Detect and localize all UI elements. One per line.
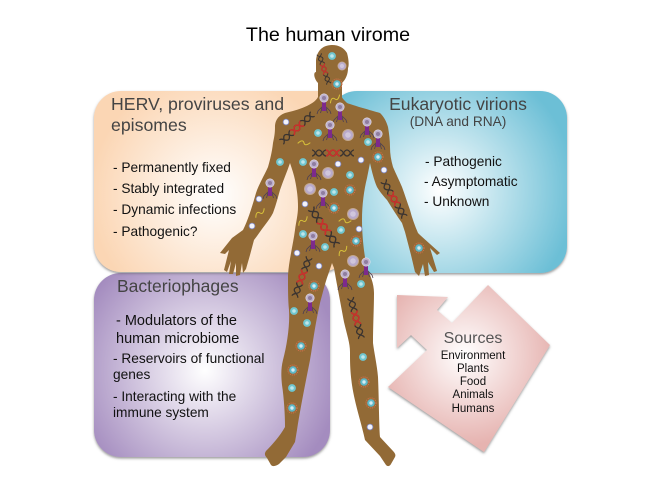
small white virions (249, 119, 387, 430)
list: bacteriophage roles: immune system (113, 405, 209, 420)
list: sources: Animals (453, 389, 494, 401)
list: HERV properties: - Permanently fixed (113, 160, 231, 175)
list: bacteriophage roles: - Reservoirs of functional (113, 351, 264, 366)
list: virion categories: - Unknown (424, 194, 489, 209)
heading: sources: Sources (444, 330, 502, 347)
list: bacteriophage roles: - Modulators of the (116, 313, 237, 329)
panel: HERV, proviruses and episomes (94, 91, 348, 272)
spiked virions (287, 79, 424, 413)
DNA proviruses (279, 53, 407, 339)
panel: eukaryotic virions (330, 91, 567, 273)
bacteriophages (263, 94, 385, 314)
heading: HERV: episomes (111, 115, 187, 135)
list: bacteriophage roles: - Interacting with the (113, 389, 236, 404)
list: sources: Plants (457, 363, 489, 375)
list: sources: Food (460, 376, 486, 388)
title: The human virome (246, 24, 410, 46)
large lilac virions (304, 62, 359, 267)
list: virion categories: - Pathogenic (425, 154, 502, 169)
list: HERV properties: - Stably integrated (113, 181, 224, 196)
human body silhouette (220, 45, 440, 466)
subheading: DNA and RNA: (DNA and RNA) (410, 114, 506, 129)
heading: HERV: HERV, proviruses and (111, 94, 284, 114)
panel: bacteriophages (94, 273, 330, 457)
list: bacteriophage roles: human microbiome (116, 331, 239, 347)
list: virion categories: - Asymptomatic (424, 174, 518, 189)
heading: eukaryotic virions: Eukaryotic virions (389, 94, 527, 114)
list: HERV properties: - Pathogenic? (113, 224, 198, 239)
list: bacteriophage roles: genes (113, 367, 150, 382)
list: sources: Environment (441, 350, 506, 362)
heading: bacteriophages: Bacteriophages (117, 276, 239, 296)
yellow RNA strands (254, 95, 351, 256)
viruses on the body (249, 52, 424, 430)
cyan virions (276, 52, 372, 392)
list: HERV properties: - Dynamic infections (113, 202, 236, 217)
list: sources: Humans (452, 403, 495, 415)
panel: sources arrow (388, 285, 550, 452)
